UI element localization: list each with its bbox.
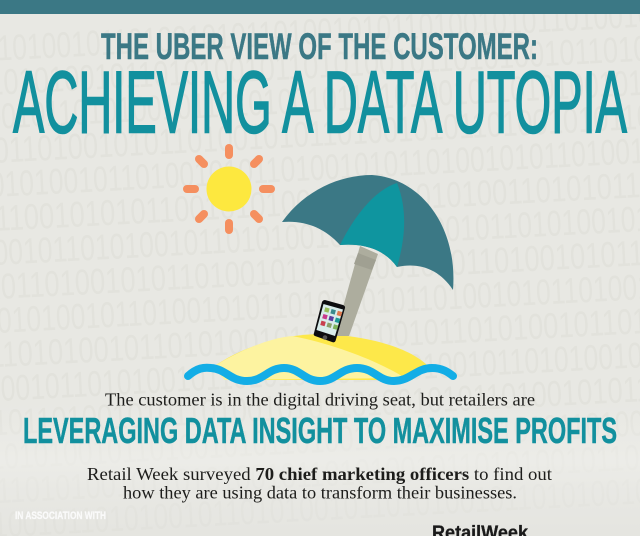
- icon: smartphone: [314, 300, 345, 342]
- illustration: island and umbrella: [188, 175, 453, 381]
- island sand: [213, 334, 428, 380]
- survey text: [87, 464, 552, 502]
- top bar: [0, 0, 640, 14]
- association label: IN ASSOCIATION WITH: [15, 510, 106, 522]
- waves: [188, 368, 453, 381]
- intro sentence: The customer is in the digital driving seat, but retailers are: [105, 390, 535, 410]
- icon: sun: [187, 148, 271, 230]
- survey text: how they are using data to transform their businesses.: [123, 482, 517, 502]
- umbrella canopy: [282, 175, 453, 290]
- umbrella pole: [335, 246, 378, 336]
- survey text: Retail Week surveyed 70 chief marketing officers to find out: [87, 464, 552, 484]
